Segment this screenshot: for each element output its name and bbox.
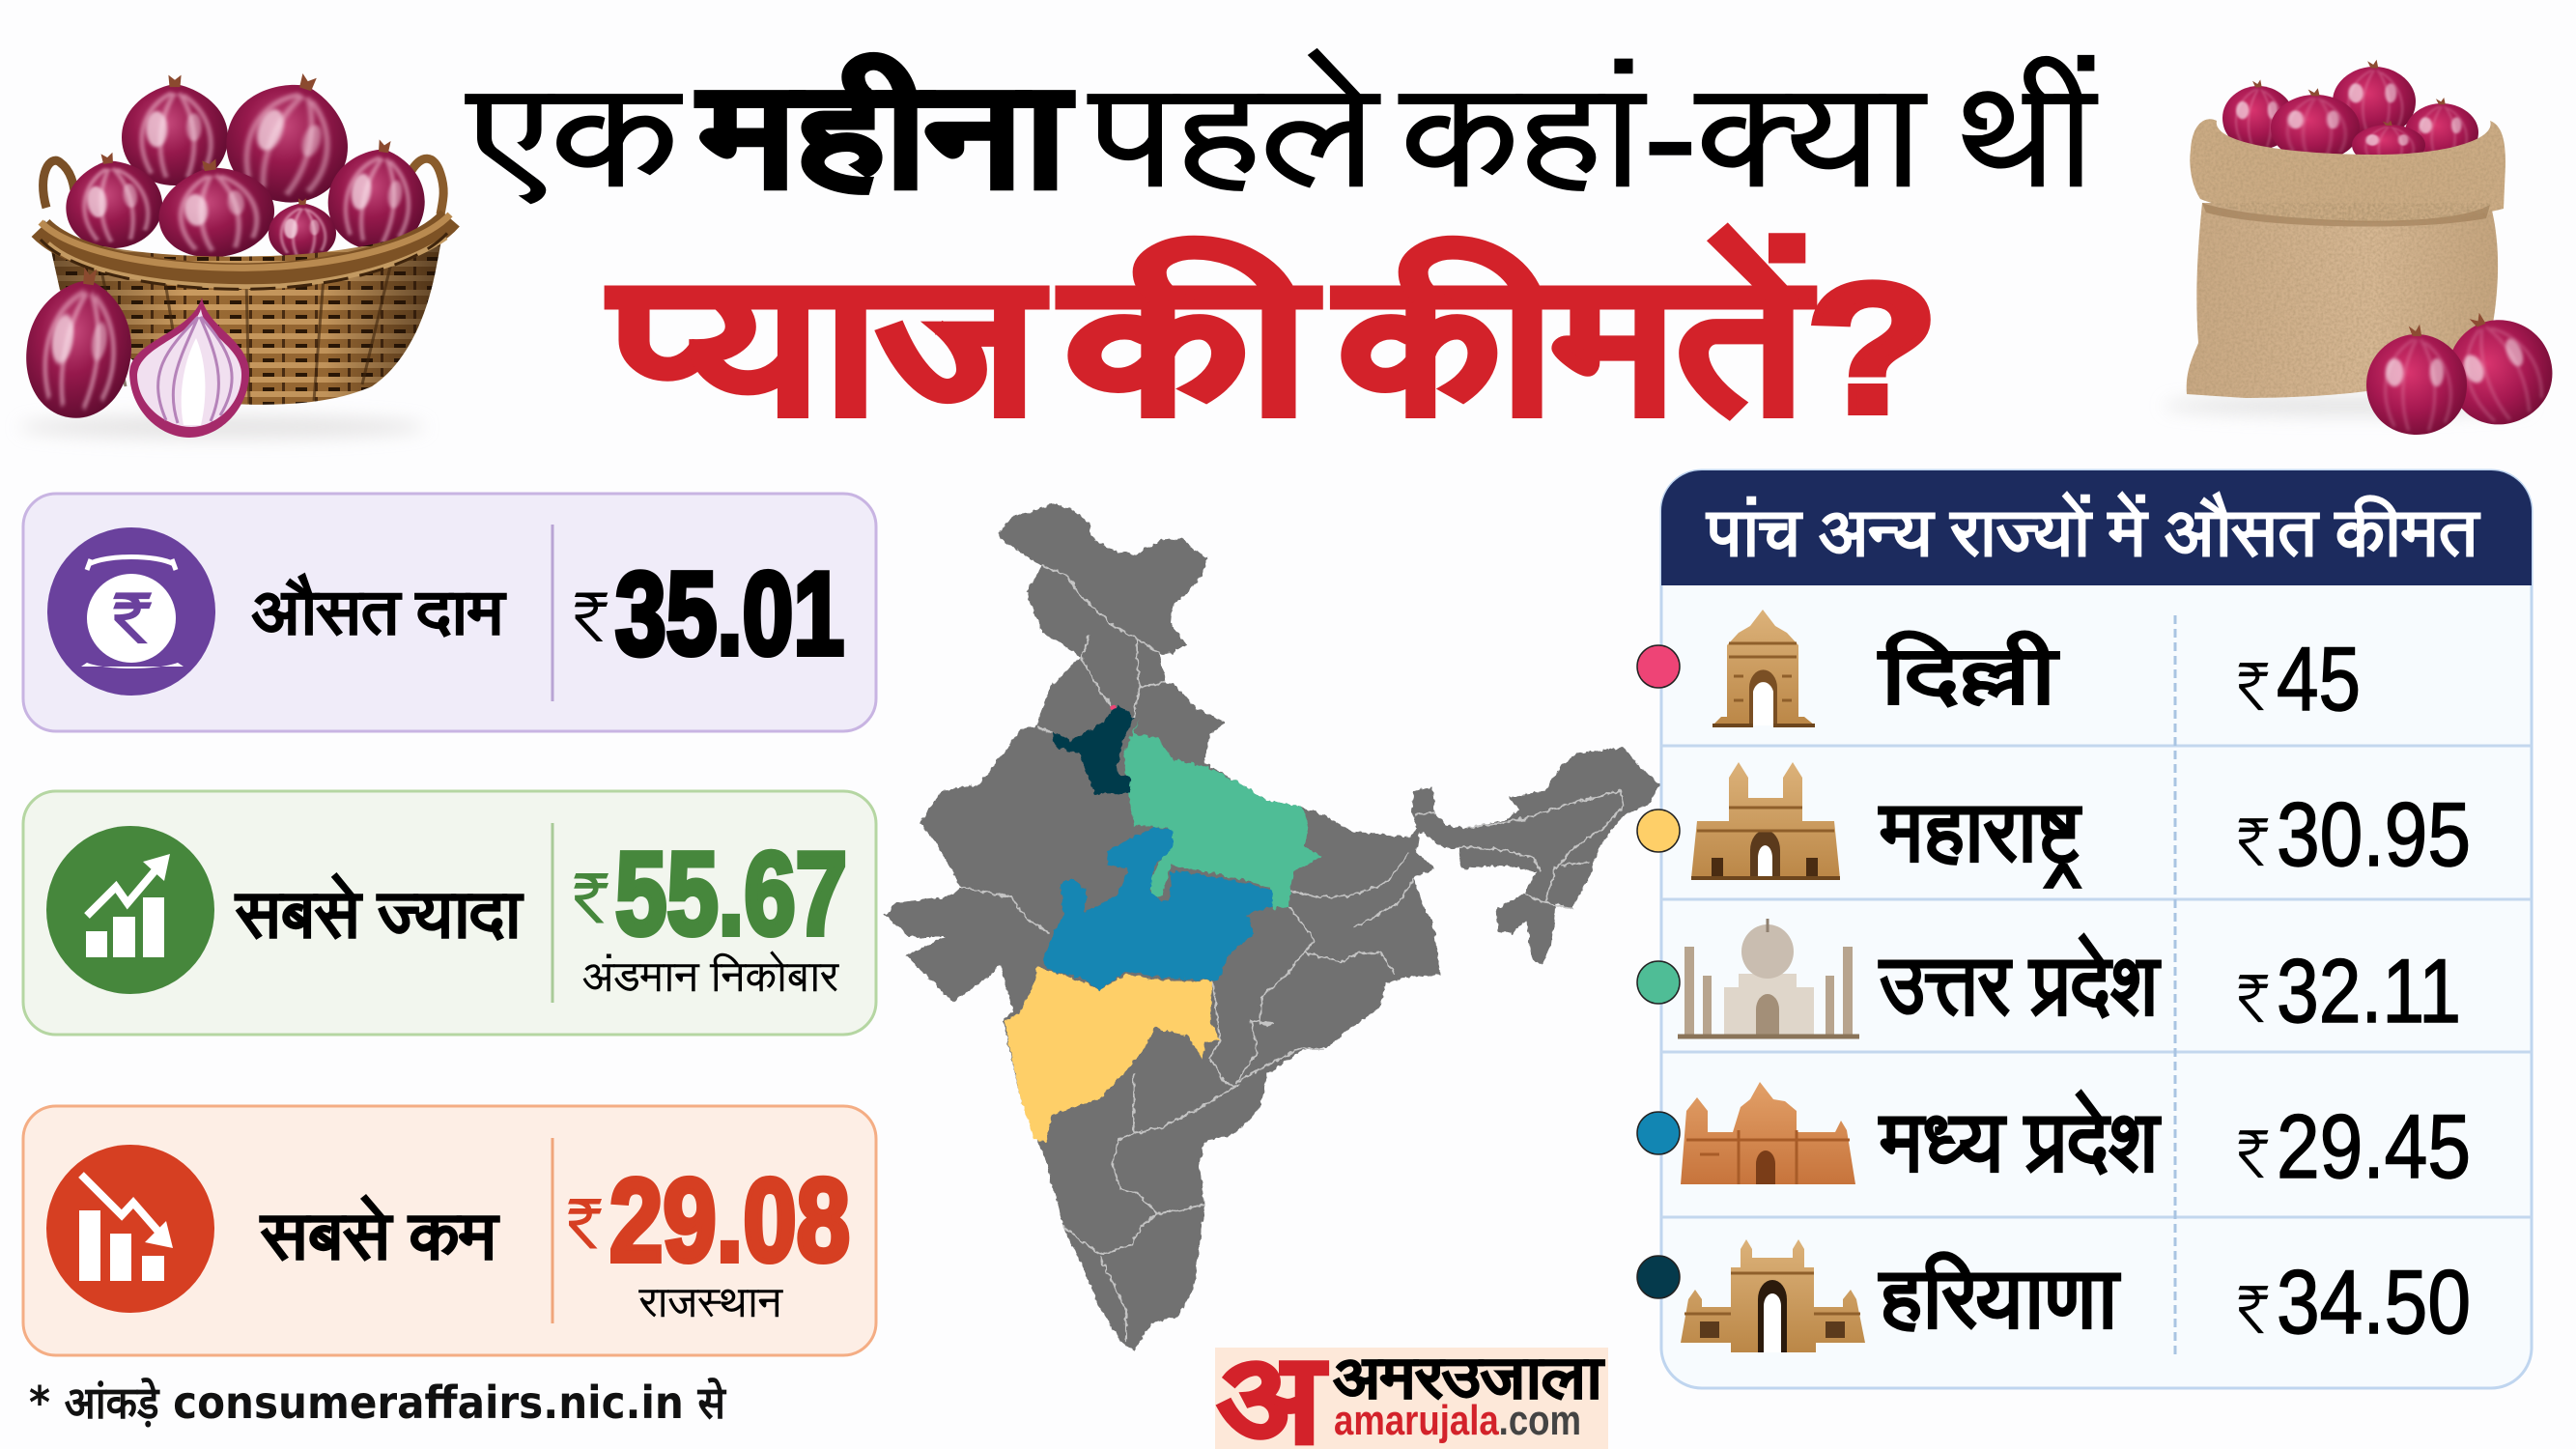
row: Maharashtra: 30.95	[2277, 783, 2471, 885]
panel: lowest price	[23, 1106, 876, 1355]
label: average price: औसत दाम	[252, 574, 506, 647]
row: Madhya Pradesh: मध्य प्रदेश	[1878, 1089, 2161, 1188]
map: base shape	[885, 503, 1660, 1350]
row: Uttar Pradesh	[1637, 919, 2461, 1041]
icon: Madhya Pradesh fort	[1681, 1082, 1855, 1184]
map: Madhya Pradesh	[1042, 827, 1273, 990]
row: Madhya Pradesh	[1637, 1082, 2471, 1197]
row: Delhi: 45	[2277, 628, 2361, 729]
value: 29.08 Rajasthan	[565, 1154, 850, 1325]
row: Madhya Pradesh: 29.45	[2277, 1095, 2471, 1197]
label: highest: सबसे ज्यादा	[235, 873, 524, 951]
value: 55.67 Andaman Nicobar: 55.67	[615, 828, 847, 959]
icon: Haryana gate	[1681, 1239, 1865, 1352]
map: state borders	[961, 565, 1624, 1342]
row: Haryana	[1637, 1239, 2471, 1352]
value: 35.01	[571, 548, 844, 679]
title: first line	[466, 49, 2098, 215]
marker: Uttar Pradesh	[1637, 961, 1680, 1004]
row: Maharashtra	[1637, 762, 2471, 889]
panel: average price	[23, 494, 876, 731]
value: 29.08 Rajasthan: ₹	[565, 1186, 603, 1264]
panel: five other states	[1637, 470, 2532, 1388]
table header	[1661, 470, 2532, 585]
title: second line: कीमतें?	[1334, 227, 1939, 451]
icon: Taj Mahal	[1678, 919, 1859, 1037]
row: Maharashtra: ₹	[2235, 805, 2270, 880]
row: Uttar Pradesh: उत्तर प्रदेश	[1878, 932, 2161, 1032]
marker: Maharashtra	[1637, 810, 1680, 852]
icon: cut onion half	[129, 298, 249, 438]
value: 35.01: 35.01	[615, 548, 844, 679]
marker: Delhi	[1637, 645, 1680, 688]
map: Uttar Pradesh	[1123, 719, 1322, 909]
row: Madhya Pradesh: ₹	[2235, 1117, 2270, 1192]
logo: Amar Ujala	[1215, 1335, 1608, 1449]
row: Haryana: हरियाणा	[1878, 1250, 2121, 1345]
logo: Amar Ujala: अमरउजाला	[1334, 1348, 1604, 1410]
row: Haryana: ₹	[2235, 1272, 2270, 1348]
icon: India Gate	[1713, 610, 1815, 725]
row: Uttar Pradesh: ₹	[2235, 961, 2270, 1037]
value: 35.01: ₹	[571, 580, 609, 657]
panel: highest price	[23, 791, 876, 1035]
image: onion basket	[18, 57, 450, 439]
title: first line: महीना	[696, 54, 1073, 215]
title: second line: की	[1060, 239, 1318, 451]
title: first line: कहां-क्या	[1400, 59, 1927, 215]
title: first line: थीं	[1958, 55, 2098, 215]
map: Delhi	[1110, 703, 1116, 710]
icon: rupee money bag: ₹	[111, 581, 153, 658]
table header: पांच अन्य राज्यों में औसत कीमत	[1706, 491, 2481, 569]
icon: Gateway of India	[1691, 762, 1840, 878]
row: Haryana: 34.50	[2277, 1251, 2471, 1352]
title: first line: एक	[466, 60, 682, 215]
map of India	[885, 503, 1660, 1350]
value: 29.08 Rajasthan: 29.08	[609, 1154, 850, 1286]
value: 55.67 Andaman Nicobar	[571, 828, 847, 1000]
title: first line: पहले	[1089, 49, 1380, 215]
title: second line	[609, 227, 1939, 451]
source footnote: * आंकड़े consumeraffairs.nic.in से	[29, 1377, 727, 1429]
title: second line: प्याज	[609, 246, 1045, 451]
map: Haryana	[1053, 705, 1134, 794]
icon: falling chart	[46, 1145, 214, 1313]
value: 29.08 Rajasthan: राजस्थान	[638, 1280, 783, 1325]
label: lowest: सबसे कम	[260, 1195, 500, 1272]
marker: Madhya Pradesh	[1637, 1112, 1680, 1154]
row: Uttar Pradesh: 32.11	[2277, 940, 2461, 1041]
value: 55.67 Andaman Nicobar: ₹	[571, 861, 609, 938]
row: Delhi: दिल्ली	[1877, 630, 2060, 720]
map: Maharashtra	[1005, 968, 1220, 1143]
value: 55.67 Andaman Nicobar: अंडमान निकोबार	[582, 952, 839, 1000]
row: Delhi: ₹	[2235, 649, 2270, 724]
icon: rupee money bag	[47, 527, 215, 696]
image: onion sack	[2164, 60, 2567, 440]
row: Maharashtra: महाराष्ट्र	[1878, 787, 2081, 889]
logo: Amar Ujala: amarujala.com	[1334, 1397, 1581, 1444]
row: Delhi	[1637, 610, 2361, 729]
icon: rising chart	[46, 826, 214, 994]
marker: Haryana	[1637, 1256, 1680, 1298]
